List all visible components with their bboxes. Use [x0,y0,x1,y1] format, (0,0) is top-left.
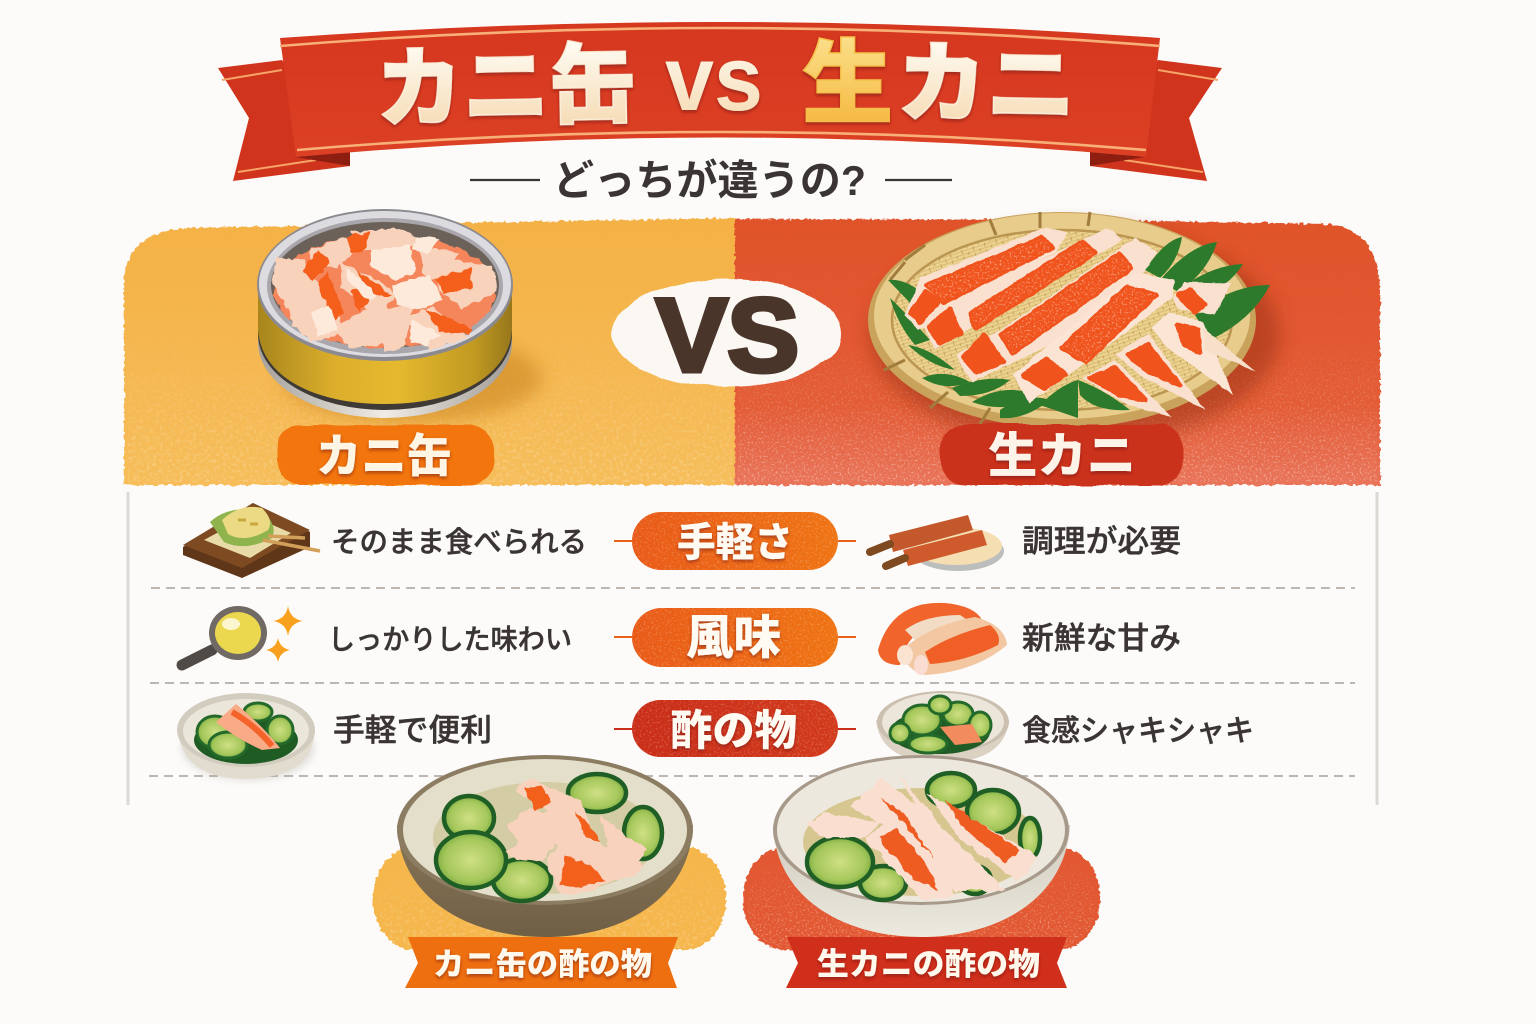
pill: vinegared dish: 酢の物 [670,707,797,754]
title text: crab: カニ [896,33,1077,136]
leaves [888,237,1270,418]
blob: fresh crab dish background [743,847,1100,950]
label: fresh crab dish banner [786,937,1067,988]
pill: flavor [632,608,838,667]
crab leg 1 [905,227,1256,417]
icon: crab can [257,209,542,422]
blob: canned crab dish background [373,847,726,950]
label: fresh crab [940,424,1184,486]
label: fresh crab dish banner: 生カニの酢の物 [817,947,1040,982]
comparison table frame and dividers [128,492,1377,805]
pill: ease [632,512,838,570]
subtitle: どっちが違うの? [553,157,866,204]
dish: fresh crab vinegared [773,755,1070,937]
cucumbers [807,773,1040,900]
panel: canned crab background [124,218,736,485]
label: canned crab: カニ缶 [316,430,452,482]
icon: small bowl with canned crab [177,693,315,780]
panel: comparison header [124,218,1380,485]
title text: fresh kanji: 生 [802,34,893,135]
title banner [218,22,1222,181]
VS badge: VS [656,278,799,394]
banner right tail [1090,60,1222,181]
row 2 right text: 新鮮な甘み [1022,621,1181,656]
pill: flavor: 風味 [686,611,781,664]
claws [1082,360,1172,417]
icon: crab sticks and paper [870,515,1004,571]
label: canned crab dish banner: カニ缶の酢の物 [433,947,652,982]
crab leg 4 [1013,273,1174,403]
icon: crab meat pieces [878,603,1007,675]
icon: magnifier with sparkles [182,606,303,665]
canned crab meat [505,778,648,895]
panel: fresh crab background [735,219,1380,485]
banner left tail [218,60,350,181]
label: canned crab dish banner [405,937,678,988]
row 2 left text: しっかりした味わい [328,624,572,655]
crab leg 2 [923,228,1123,350]
row 3 left text: 手軽で便利 [333,713,492,748]
VS badge [612,278,842,394]
banner main band [280,22,1160,157]
row connectors [614,541,856,729]
row 1 right text: 調理が必要 [1022,524,1181,559]
crab leg 3 [956,238,1158,382]
orange meat [911,238,1205,400]
row 1 left text: そのまま食べられる [331,526,587,559]
pill: ease: 手軽さ [677,521,793,565]
icon: crab legs on bamboo basket [868,212,1280,445]
icon: small bowl with fresh crab [876,691,1009,763]
label: fresh crab: 生カニ [988,430,1136,483]
icon: food on wooden board [183,503,320,578]
title text: vs: vs [665,28,763,130]
title text: canned crab: カニ缶 [375,37,637,138]
pill: vinegared dish [632,700,838,757]
meat speckle [927,238,1156,362]
dish: canned crab vinegared [397,755,693,937]
crab meat in can [272,228,498,352]
label: canned crab [276,425,494,485]
fresh crab strips [806,773,1039,900]
row 3 right text: 食感シャキシャキ [1022,715,1254,748]
cucumbers [436,774,662,901]
